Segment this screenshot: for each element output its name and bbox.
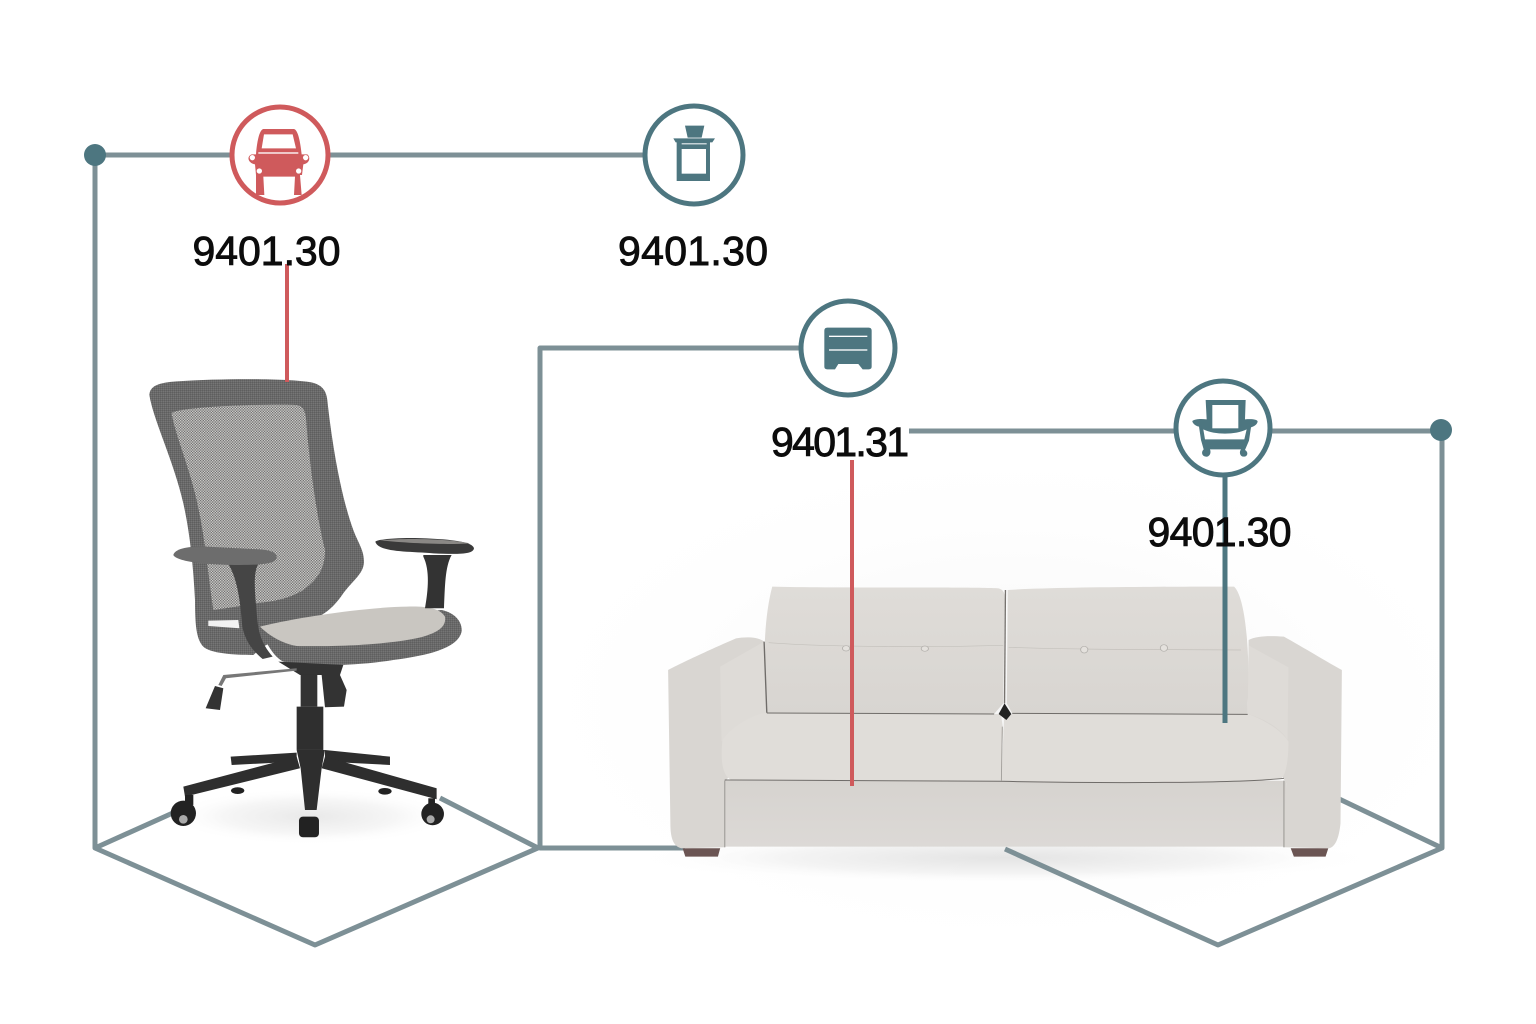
sofa cushion seams	[769, 643, 1241, 650]
sofa left back cushion	[764, 587, 1005, 714]
callout line: chair, red	[285, 264, 289, 382]
callout line: sofa, red	[850, 460, 854, 786]
sofa left seat cushion	[722, 713, 1003, 781]
chair left armrest	[173, 547, 277, 659]
code label: dresser: 9401.31	[771, 419, 909, 465]
sofa right back cushion	[1007, 587, 1248, 714]
callout line: sofa, teal	[1222, 474, 1228, 723]
frame lines: sofa platform	[540, 348, 1442, 945]
chair mesh panel	[172, 405, 325, 610]
code label: cabinet: 9401.30	[618, 228, 768, 274]
icon: armchair	[1176, 381, 1270, 475]
sofa gap between back cushions	[1003, 590, 1007, 703]
chair back frame	[149, 379, 364, 655]
chair slot	[208, 620, 239, 628]
sofa tufting buttons	[842, 645, 1168, 653]
sofa cushion shadow lines	[725, 713, 1284, 783]
code label: chair red: 9401.30	[192, 228, 340, 274]
icon: car	[232, 107, 328, 203]
chair mechanism and lever	[206, 662, 347, 750]
sofa feet	[683, 848, 1328, 857]
icon: dresser	[801, 301, 895, 395]
sofa base front	[725, 781, 1286, 847]
anchor dot: right	[1430, 419, 1452, 441]
chair casters	[171, 787, 444, 837]
chair right armrest	[375, 538, 474, 608]
chair seat cushion	[260, 607, 445, 646]
chair photo illustration	[149, 379, 474, 845]
sofa right seat cushion	[1001, 713, 1288, 782]
sofa right arm	[1248, 636, 1342, 848]
chair star base	[183, 750, 437, 810]
icon: cabinet	[645, 106, 743, 204]
chair seat base	[260, 610, 462, 665]
code label: armchair: 9401.30	[1148, 509, 1292, 555]
sofa center crease	[999, 703, 1011, 720]
anchor dot: top left	[84, 144, 106, 166]
sofa photo illustration	[668, 587, 1342, 857]
sofa left arm	[668, 637, 767, 848]
frame lines: chair platform	[95, 155, 650, 945]
